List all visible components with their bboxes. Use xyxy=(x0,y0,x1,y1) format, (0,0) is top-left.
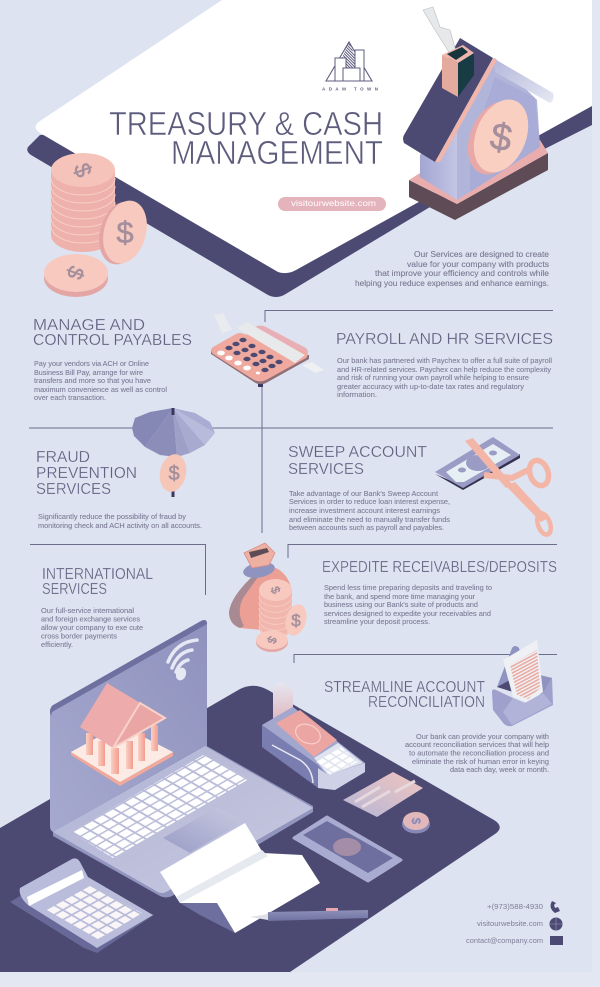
body text: monitoring check and ACH activity on all accounts. xyxy=(38,521,202,530)
heading xyxy=(36,449,137,498)
heading: INTERNATIONAL xyxy=(42,566,153,583)
body text: business using our Bank's suite of products and xyxy=(324,600,478,609)
body text: streamline your deposit process. xyxy=(324,617,430,626)
heading xyxy=(288,444,428,478)
body text: to automate the reconciliation process and xyxy=(409,748,549,758)
body text: and foreign exchange services xyxy=(41,614,140,624)
heading: CONTROL PAYABLES xyxy=(33,332,192,349)
body text: and HR-related services. Paychex can help reduce the complexity xyxy=(337,365,551,374)
back section xyxy=(245,326,308,360)
card slot xyxy=(272,745,313,783)
section: streamline account reconciliation xyxy=(324,679,549,774)
laptop screen xyxy=(50,620,207,833)
dark roof xyxy=(403,38,493,162)
intro text: Our Services are designed to create xyxy=(414,250,550,259)
dark keys xyxy=(225,338,283,372)
envelope back xyxy=(497,646,530,690)
section: expedite receivables/deposits xyxy=(322,559,557,626)
desk surface xyxy=(0,686,500,972)
body text: efficiently. xyxy=(41,640,73,649)
icon: payment calculator xyxy=(211,313,324,387)
intro text: value for your company with products xyxy=(407,260,549,269)
house base xyxy=(409,153,548,220)
body text: between accounts such as payroll and payables. xyxy=(289,523,444,532)
keypad keys xyxy=(316,746,358,775)
heading: SERVICES xyxy=(36,481,111,498)
website pill: visitourwebsite.com xyxy=(291,198,376,208)
section: payroll and hr services xyxy=(336,331,553,399)
body text: transfers and more so that you have xyxy=(34,376,151,385)
icon: money bag with coins: $ xyxy=(268,584,283,596)
bank building xyxy=(71,683,173,786)
keypad side xyxy=(318,763,365,790)
body text: eliminate the risk of human error in keying xyxy=(412,757,549,766)
heading: FRAUD xyxy=(36,449,90,466)
body text xyxy=(41,606,143,649)
body text: and risk of running your own payroll while helping to ensure xyxy=(337,373,529,382)
smoke xyxy=(423,7,457,57)
body text: maximum convenience as well as control xyxy=(34,385,167,394)
icon: calculator xyxy=(10,858,154,953)
body shadow edge xyxy=(211,350,309,384)
icon: smartphone with fingerprint xyxy=(294,817,401,881)
heading xyxy=(33,317,192,349)
body text: Our bank has partnered with Paychex to offer a full suite of payroll xyxy=(337,356,552,365)
body text xyxy=(324,583,492,626)
intro text: that improve your efficiency and controls while xyxy=(375,269,550,278)
gable roof strip xyxy=(493,58,554,103)
icon: folded paper xyxy=(160,823,320,933)
keypad panel xyxy=(314,743,363,775)
body text: Business Bill Pay, arrange for wire xyxy=(34,368,143,377)
body text: services designed to expedite your receivables and xyxy=(324,609,491,618)
section: fraud prevention services xyxy=(36,449,202,530)
coin xyxy=(458,93,532,183)
icon: envelope with receipt xyxy=(492,640,553,726)
icon: coin stack: $ xyxy=(62,263,89,283)
bag body xyxy=(229,568,292,630)
icon: credit card xyxy=(343,772,423,817)
heading: MANAGE AND xyxy=(33,317,145,334)
logo: Adam Town xyxy=(322,42,378,92)
body text: the bank, and spend more time managing your xyxy=(324,592,476,601)
heading: PAYROLL AND HR SERVICES xyxy=(336,331,553,348)
icon: coin stack xyxy=(44,153,154,297)
title xyxy=(109,105,383,171)
heading: PREVENTION xyxy=(36,465,137,482)
chimney xyxy=(442,55,458,97)
body text: Services in order to reduce loan interest expense, xyxy=(289,497,450,506)
body text: Pay your vendors via ACH or Online xyxy=(34,359,149,368)
terminal top xyxy=(262,707,365,780)
icon: coin stack: $ xyxy=(116,215,134,250)
body text xyxy=(337,356,552,399)
section: international services xyxy=(41,566,153,649)
heading: EXPEDITE RECEIVABLES/DEPOSITS xyxy=(322,559,557,576)
keyboard xyxy=(71,754,249,858)
stand xyxy=(258,384,263,387)
heading: SERVICES xyxy=(288,461,364,478)
top dark band behind the panel xyxy=(27,106,592,297)
icon: banknote and scissors xyxy=(435,437,553,536)
section: manage and control payables xyxy=(33,317,192,402)
paper band xyxy=(237,322,305,363)
title: TREASURY & CASH xyxy=(109,105,383,142)
icon: house with coin xyxy=(403,7,554,220)
body text: Our bank can provide your company with xyxy=(416,732,549,741)
email: contact@company.com xyxy=(466,936,543,945)
body text xyxy=(289,489,450,532)
icon: umbrella with coin xyxy=(132,408,215,497)
laptop base xyxy=(53,745,313,898)
section: sweep account services xyxy=(288,444,450,532)
pink screen xyxy=(276,710,337,757)
body text: information. xyxy=(337,390,377,399)
icon: coin on desk xyxy=(402,812,430,834)
icon: umbrella with coin: $ xyxy=(168,463,180,485)
website: visitourwebsite.com xyxy=(477,919,543,928)
body text: Spend less time preparing deposits and traveling to xyxy=(324,583,492,592)
body text: Significantly reduce the possibility of fraud by xyxy=(38,512,186,521)
body text: data each day, week or month. xyxy=(450,765,549,774)
website pill xyxy=(278,197,386,211)
pink face xyxy=(211,333,308,382)
body text: and eliminate the need to manually transfer funds xyxy=(289,515,450,524)
title: MANAGEMENT xyxy=(171,134,383,171)
body text: cross border payments xyxy=(41,632,117,640)
terminal side and front xyxy=(262,707,365,790)
icon: card payment terminal xyxy=(262,682,365,790)
body text: increase investment account interest earnings xyxy=(289,506,440,515)
phone: +(973)588-4930 xyxy=(487,902,543,911)
icon: pen xyxy=(250,908,368,921)
gable inset xyxy=(470,77,540,192)
icon: house with coin: $ xyxy=(487,115,515,161)
touchpad xyxy=(163,807,243,853)
white title panel xyxy=(36,0,592,273)
right wall xyxy=(457,58,540,200)
intro text xyxy=(355,250,550,288)
heading: SERVICES xyxy=(42,581,107,598)
body text xyxy=(405,732,549,774)
band xyxy=(242,560,276,580)
wifi symbol xyxy=(168,640,197,672)
receipt paper xyxy=(503,640,543,703)
body text xyxy=(38,512,202,530)
icon: money bag with coins: $ xyxy=(264,634,280,646)
envelope front xyxy=(492,677,553,726)
body text: greater accuracy with up-to-date tax rates and regulatory xyxy=(337,382,524,391)
receipt xyxy=(273,682,293,725)
body text: over each transaction. xyxy=(34,393,106,402)
white keys xyxy=(217,351,260,374)
back paper xyxy=(214,313,232,333)
icon: laptop xyxy=(50,620,313,898)
body text: account reconciliation services that will help xyxy=(405,740,549,749)
wifi dot xyxy=(174,666,188,682)
icon: money bag with coins xyxy=(229,543,310,652)
body text xyxy=(34,359,167,402)
section divider lines xyxy=(29,310,557,663)
intro text: helping you reduce expenses and enhance earnings. xyxy=(355,279,549,288)
left wall xyxy=(420,130,458,200)
heading: SWEEP ACCOUNT xyxy=(288,444,428,461)
icon: coin on desk: $ xyxy=(409,818,423,825)
contact info xyxy=(466,901,563,945)
heading: STREAMLINE ACCOUNT xyxy=(324,679,485,696)
logo: Adam Town: ADAM TOWN xyxy=(322,86,378,92)
icon: coin stack: $ xyxy=(69,160,97,181)
heading: RECONCILIATION xyxy=(368,694,485,711)
body text: allow your company to exe cute xyxy=(41,623,143,632)
pouch top xyxy=(244,543,275,568)
heading xyxy=(42,566,153,598)
coins stack xyxy=(259,590,292,637)
body text: Our full-service international xyxy=(41,606,134,615)
icon: money bag with coins: $ xyxy=(291,611,301,630)
heading xyxy=(324,679,485,711)
body text: Take advantage of our Bank's Sweep Account xyxy=(289,489,438,498)
